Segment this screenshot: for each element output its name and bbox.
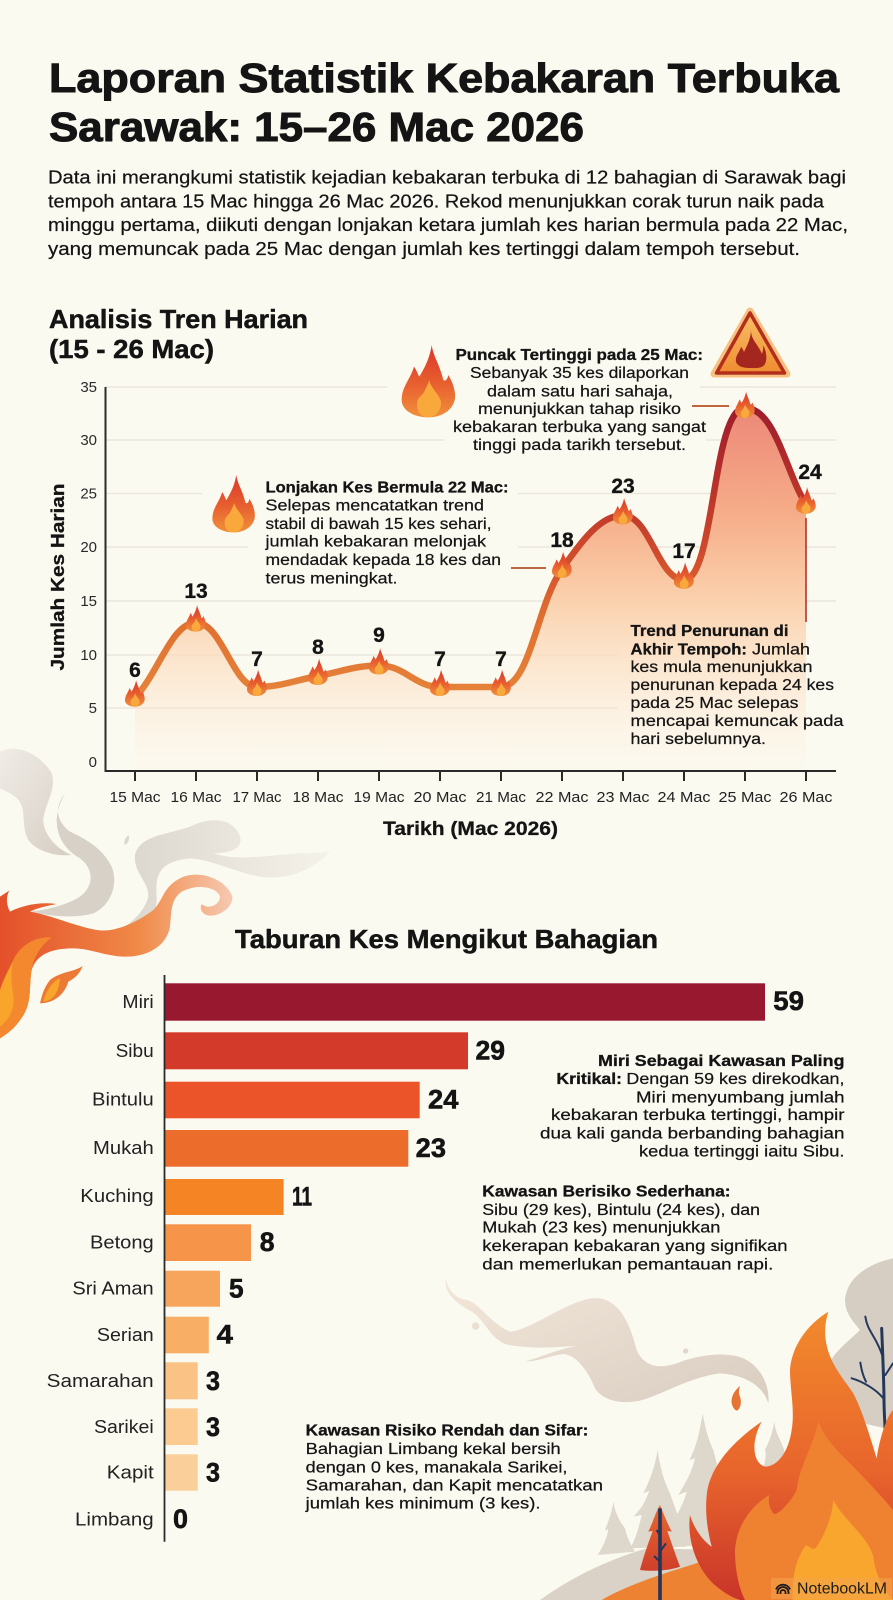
x axis labels: 15 Mac [110, 789, 161, 806]
callout: Miri critical: Miri Sebagai Kawasan Paling [598, 1053, 844, 1070]
callout: surge: Lonjakan Kes Bermula 22 Mac: [266, 480, 508, 496]
red tree [640, 1505, 680, 1571]
bar values: 0 [173, 1504, 188, 1534]
icon: large flame peak [402, 345, 455, 417]
dark trunk [654, 1508, 665, 1600]
title: Sarawak: 15–26 Mac 2026 [49, 104, 584, 150]
grey smoke right [828, 1258, 893, 1430]
callout: moderate risk: dan memerlukan pemantauan rapi. [482, 1256, 773, 1273]
x axis labels: 22 Mac [536, 789, 589, 806]
callout: decline: Akhir Tempoh: [630, 642, 747, 658]
axes [106, 387, 836, 781]
bar values: 3 [206, 1366, 220, 1396]
intro paragraph: minggu pertama, diikuti dengan lonjakan ketara jumlah kes harian bermula pada 22 Mac, [48, 214, 848, 235]
division labels: Sibu [116, 1040, 154, 1061]
x axis labels: 17 Mac [232, 789, 282, 806]
intro paragraph [48, 166, 848, 259]
callout: moderate risk: Mukah (23 kes) menunjukkan [482, 1220, 720, 1237]
division labels: Betong [90, 1232, 154, 1252]
division labels: Sarikei [94, 1416, 154, 1437]
division labels: Bintulu [92, 1088, 154, 1110]
bar values: 59 [773, 986, 804, 1016]
y axis labels: 15 [80, 593, 97, 610]
hills [540, 1548, 730, 1600]
data labels: 7 [251, 648, 263, 671]
x axis labels: 23 Mac [596, 789, 650, 806]
bar values: 3 [206, 1458, 220, 1488]
x axis labels: 24 Mac [658, 789, 711, 806]
badge: NotebookLM: NotebookLM [797, 1580, 887, 1598]
bar values: 5 [229, 1273, 244, 1303]
callout: peak: Puncak Tertinggi pada 25 Mac: [456, 347, 703, 364]
y axis title: Jumlah Kes Harian [47, 484, 68, 670]
callout: low risk: Samarahan, dan Kapit mencatatkan [306, 1478, 603, 1495]
callout: Miri critical: Dengan 59 kes direkodkan, [626, 1071, 844, 1088]
division labels: Mukah [93, 1137, 154, 1158]
x axis labels: 25 Mac [718, 789, 772, 806]
trend line [135, 408, 806, 698]
bar values: 3 [206, 1412, 220, 1442]
data labels: 18 [550, 529, 574, 552]
icon: flame surge [212, 475, 255, 532]
y axis labels: 25 [80, 486, 97, 502]
division labels: Kapit [107, 1462, 154, 1482]
line chart: daily cases [47, 379, 836, 840]
callout: peak: kebakaran terbuka yang sangat [453, 419, 707, 436]
callout: low risk: dengan 0 kes, manakala Sarikei, [306, 1459, 567, 1476]
callout: low risk [305, 1423, 603, 1512]
data labels: 9 [373, 624, 385, 647]
x axis labels: 20 Mac [414, 789, 467, 806]
callout: surge: stabil di bawah 15 kes sehari, [266, 516, 492, 533]
callout: peak: tinggi pada tarikh tersebut. [473, 437, 686, 454]
division labels: Limbang [75, 1508, 154, 1530]
drifting ember [732, 1386, 741, 1411]
y axis labels [80, 379, 97, 771]
callout: decline: Jumlah [752, 642, 810, 658]
bars [165, 983, 765, 1491]
intro paragraph: yang memuncak pada 25 Mac dengan jumlah kes tertinggi dalam tempoh tersebut. [48, 238, 800, 259]
callout: Miri critical: kedua tertinggi iaitu Sibu. [639, 1144, 844, 1161]
main flame [689, 1312, 893, 1600]
flame markers [125, 391, 816, 707]
data labels: 6 [129, 659, 141, 682]
x axis labels: 26 Mac [780, 789, 833, 806]
division labels: Miri [122, 991, 154, 1012]
bar values: 24 [428, 1084, 458, 1114]
mid flame [735, 1422, 893, 1600]
callout: low risk: Bahagian Limbang kekal bersih [306, 1441, 561, 1458]
title: Laporan Statistik Kebakaran Terbuka [49, 55, 840, 101]
x axis title: Tarikh (Mac 2026) [383, 818, 558, 840]
callout: decline [630, 623, 844, 748]
illustration: smoke and flame top-left [0, 749, 330, 1038]
y axis labels: 35 [80, 379, 97, 396]
callout: Miri critical: Kritikal: [556, 1071, 622, 1088]
callout: decline: penurunan kepada 24 kes [630, 677, 834, 694]
callout: moderate risk: Kawasan Berisiko Sederhana: [482, 1184, 731, 1201]
callout: Miri critical [540, 1053, 844, 1161]
intro paragraph: tempoh antara 15 Mac hingga 26 Mac 2026. Rekod menunjukkan corak turun naik pada [48, 190, 825, 212]
data labels: 7 [495, 648, 507, 671]
heading: distribution: Taburan Kes Mengikut Bahagian [235, 924, 658, 954]
callout: peak: Sebanyak 35 kes dilaporkan [470, 365, 689, 382]
title [49, 55, 840, 150]
callout: decline: kes mula menunjukkan [630, 659, 812, 676]
callout: decline: Trend Penurunan di [630, 623, 788, 640]
x axis labels: 19 Mac [354, 789, 405, 806]
data labels [129, 461, 822, 682]
callout: decline: pada 25 Mac selepas [630, 695, 799, 712]
callout: Miri critical: kebakaran terbuka tertinggi, hampir [551, 1107, 844, 1124]
y axis labels: 5 [89, 700, 97, 717]
callout: decline: mencapai kemuncak pada [630, 713, 844, 730]
division labels: Kuching [80, 1185, 154, 1206]
division labels: Sri Aman [72, 1277, 154, 1298]
callout: surge: jumlah kebakaran melonjak [264, 534, 486, 550]
bar chart: cases by division [47, 975, 804, 1542]
callout: Miri critical: dua kali ganda berbanding bahagian [540, 1125, 844, 1142]
y axis labels: 30 [80, 432, 97, 449]
y axis labels: 10 [80, 647, 97, 664]
callout: peak: menunjukkan tahap risiko [478, 401, 681, 418]
illustration: wildfire scene bottom-right [445, 1258, 893, 1600]
callout: peak: dalam satu hari sahaja, [487, 384, 673, 400]
callout: surge [264, 480, 508, 588]
callout: moderate risk [482, 1184, 788, 1273]
badge: NotebookLM [771, 1578, 892, 1599]
cream trees [660, 1413, 717, 1546]
orange hill [602, 1560, 750, 1600]
division labels [47, 991, 154, 1530]
icon: warning triangle [714, 311, 787, 374]
x axis labels: 21 Mac [476, 789, 526, 806]
callout: Miri critical: Miri menyumbang jumlah [636, 1089, 844, 1106]
intro paragraph: Data ini merangkumi statistik kejadian kebakaran terbuka di 12 bahagian di Sarawak bagi [48, 166, 846, 188]
bar values: 11 [292, 1182, 312, 1212]
x axis labels: 18 Mac [292, 789, 344, 806]
inner flame [792, 1500, 893, 1600]
division labels: Serian [97, 1324, 154, 1345]
data labels: 24 [798, 461, 822, 484]
callout: low risk: Kawasan Risiko Rendah dan Sifar: [306, 1423, 588, 1440]
heading: daily trend: (15 - 26 Mac) [49, 334, 214, 364]
bar values: 8 [260, 1227, 274, 1257]
data labels: 17 [672, 540, 696, 563]
y axis labels: 0 [89, 754, 97, 771]
callout: surge: terus meningkat. [266, 570, 398, 588]
x axis labels: 16 Mac [170, 789, 222, 806]
y axis labels: 20 [80, 539, 97, 556]
callout: low risk: jumlah kes minimum (3 kes). [305, 1495, 540, 1512]
bar values: 4 [217, 1319, 233, 1349]
division labels: Samarahan [47, 1370, 154, 1391]
data labels: 13 [184, 580, 208, 603]
bar values [173, 986, 804, 1534]
heading: daily trend [49, 304, 308, 364]
smoke swirl [445, 1278, 769, 1403]
dead tree [882, 1328, 885, 1440]
callout: surge: Selepas mencatatkan trend [266, 498, 484, 514]
heading: daily trend: Analisis Tren Harian [49, 304, 308, 334]
area under line [135, 408, 806, 771]
bar values: 23 [416, 1133, 446, 1163]
bar values: 29 [476, 1035, 505, 1065]
callout: surge: mendadak kepada 18 kes dan [266, 552, 501, 569]
callout: moderate risk: Sibu (29 kes), Bintulu (24 kes), dan [482, 1202, 760, 1219]
callout: decline: hari sebelumnya. [630, 731, 766, 748]
data labels: 8 [312, 636, 324, 659]
data labels: 7 [434, 648, 446, 671]
data labels: 23 [611, 475, 635, 498]
x axis labels [110, 789, 833, 806]
leader lines [511, 406, 806, 622]
callout: moderate risk: kekerapan kebakaran yang signifikan [482, 1238, 788, 1255]
callout: peak [453, 347, 707, 454]
